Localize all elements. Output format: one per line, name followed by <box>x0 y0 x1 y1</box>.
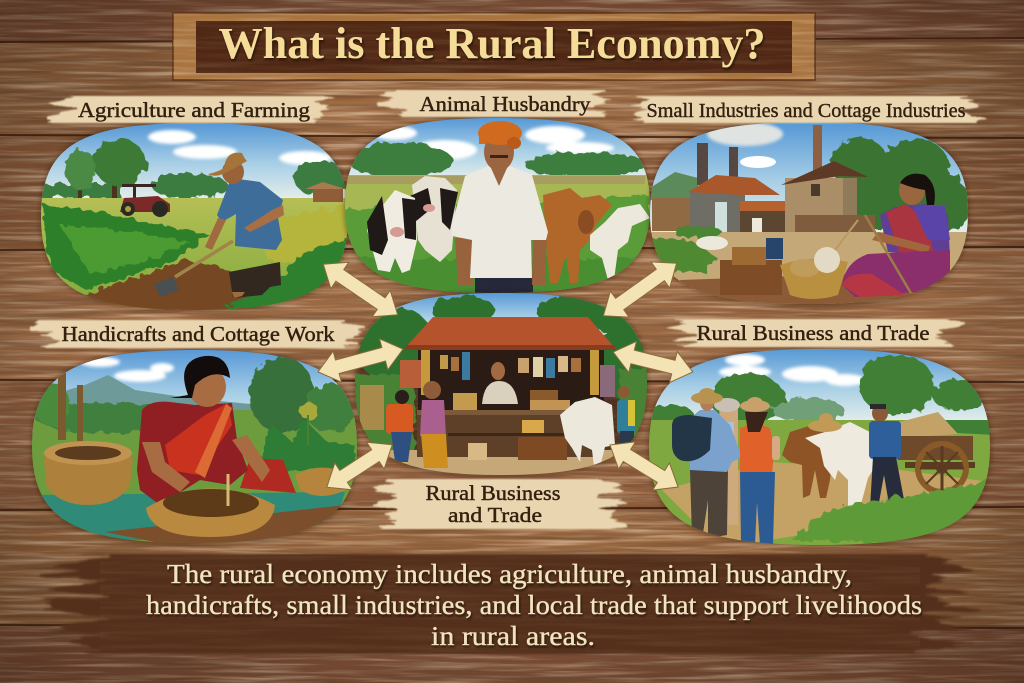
icon: white cow <box>590 204 650 280</box>
icon: white cow <box>560 397 615 467</box>
summary panel <box>75 554 945 654</box>
icon: visitors <box>672 388 780 545</box>
icon: farmer <box>154 153 284 298</box>
label: agriculture and farming: Agriculture and Farming <box>78 98 311 122</box>
arrow: industries to market <box>594 250 686 329</box>
panel: agriculture and farming <box>40 120 350 313</box>
arrow: handicrafts to market <box>318 431 401 501</box>
icon: cart <box>898 412 975 492</box>
panel: animal husbandry <box>340 115 655 298</box>
icon: man with turban <box>451 121 548 293</box>
panel: rural business and trade <box>645 345 995 550</box>
panel: market stall <box>355 290 655 480</box>
arrow: market to trade label <box>609 337 697 387</box>
icon: customers <box>386 381 448 468</box>
icon: oxen <box>782 413 876 508</box>
summary text <box>146 559 922 651</box>
label: rural business and trade center: Rural Business <box>426 481 560 505</box>
title plank <box>173 13 815 80</box>
title text: What is the Rural Economy? <box>218 19 766 68</box>
label: rural business and trade center <box>382 479 612 529</box>
label: animal husbandry: Animal Husbandry <box>420 92 591 116</box>
label: rural business and trade right: Rural Business and Trade <box>696 321 930 345</box>
summary text: The rural economy includes agriculture, animal husbandry, <box>167 559 852 589</box>
summary text: handicrafts, small industries, and local trade that support livelihoods <box>146 590 922 620</box>
icon: basket right <box>295 468 350 496</box>
arrow: market to trade <box>602 431 686 501</box>
icon: man in yellow shirt <box>617 386 635 444</box>
icon: woman in red sari <box>137 356 296 505</box>
icon: basket with yarn <box>780 220 858 299</box>
arrow: handicrafts label to market <box>314 334 407 387</box>
icon: brown cow <box>543 188 612 283</box>
icon: stall <box>400 317 615 460</box>
icon: tractor <box>120 184 170 217</box>
panel: small industries <box>645 118 980 312</box>
icon: shopkeeper <box>482 362 518 404</box>
label: animal husbandry <box>392 90 598 117</box>
label: rural business and trade right <box>682 319 950 347</box>
icon: cart driver <box>869 404 904 502</box>
icon: basket left <box>44 441 133 505</box>
arrow: farming to market <box>314 251 407 328</box>
label: small industries and cottage industries: Small Industries and Cottage Industries <box>646 100 966 122</box>
summary text: in rural areas. <box>431 621 595 651</box>
icon: basket center <box>146 474 275 537</box>
icon: woman in purple sari <box>842 174 950 297</box>
icon: black and white cows <box>367 176 458 273</box>
label: rural business and trade center: and Trade <box>448 503 542 527</box>
label: handicrafts and cottage work: Handicrafts and Cottage Work <box>62 322 335 346</box>
panel: handicrafts <box>28 345 360 545</box>
